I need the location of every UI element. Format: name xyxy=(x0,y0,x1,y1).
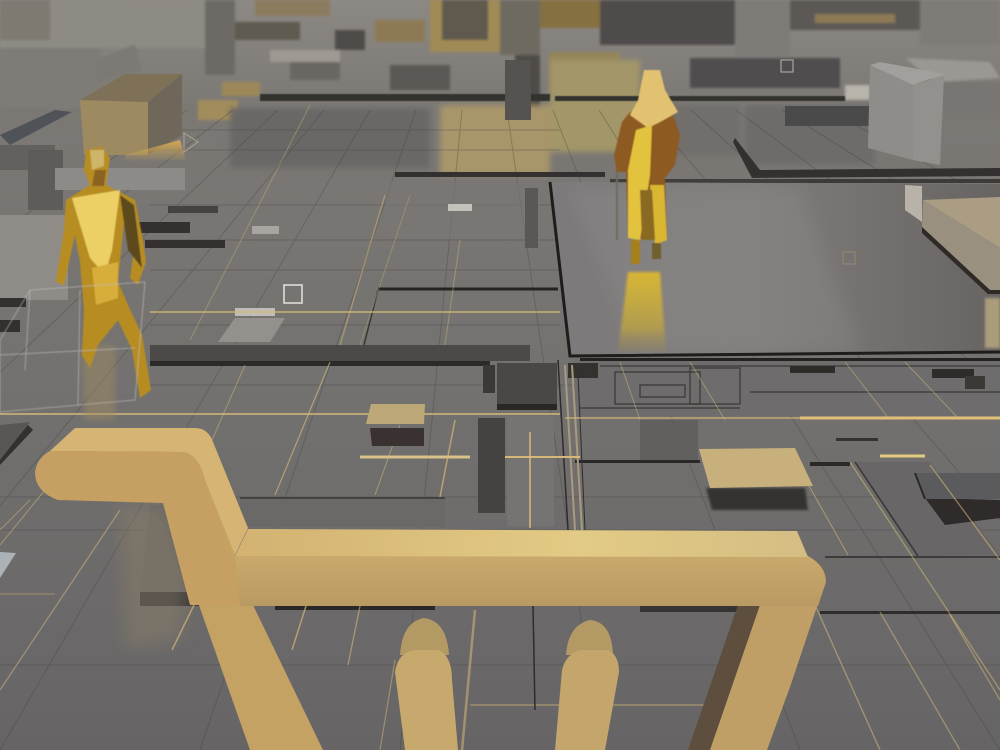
gold figure: man pushing glass cart xyxy=(0,147,151,420)
central grid panel xyxy=(385,181,525,239)
circuit panel right of centre xyxy=(568,358,1000,466)
gold block upper left xyxy=(80,74,186,162)
tan box on the right edge xyxy=(905,185,1000,348)
gold figure: walking man in coat xyxy=(614,70,680,352)
reflection of man xyxy=(82,345,115,420)
right-side raised block xyxy=(868,62,945,165)
gold raised tile right xyxy=(699,448,813,510)
channel lines beside the centre column xyxy=(558,360,585,530)
panel edge lines and dark bar mid left xyxy=(150,289,558,526)
ghost cart reflection on the floor xyxy=(120,505,190,650)
handle top face xyxy=(50,428,248,555)
right large floor panel xyxy=(550,182,1000,356)
small pale floor tabs xyxy=(218,204,472,342)
top bar top face xyxy=(235,529,808,557)
small outlined square markers xyxy=(184,60,855,303)
top bar front face xyxy=(235,556,826,606)
lower tiles and shadows xyxy=(0,422,1000,614)
gold raised tile centre xyxy=(366,404,425,446)
right rear post xyxy=(555,620,619,750)
reflection of walking man xyxy=(618,272,666,352)
shopping cart gold 3D icon xyxy=(35,428,826,750)
warm reflections on the far floor xyxy=(230,60,875,175)
distant blocks at the top of the scene xyxy=(0,0,1000,120)
dark horizontal circuit channels xyxy=(0,60,1000,465)
left rear post xyxy=(395,618,458,750)
handle front face xyxy=(35,451,253,605)
front right upright xyxy=(688,580,826,750)
diagonal left post xyxy=(163,465,323,750)
glass shopping cart xyxy=(0,282,145,412)
